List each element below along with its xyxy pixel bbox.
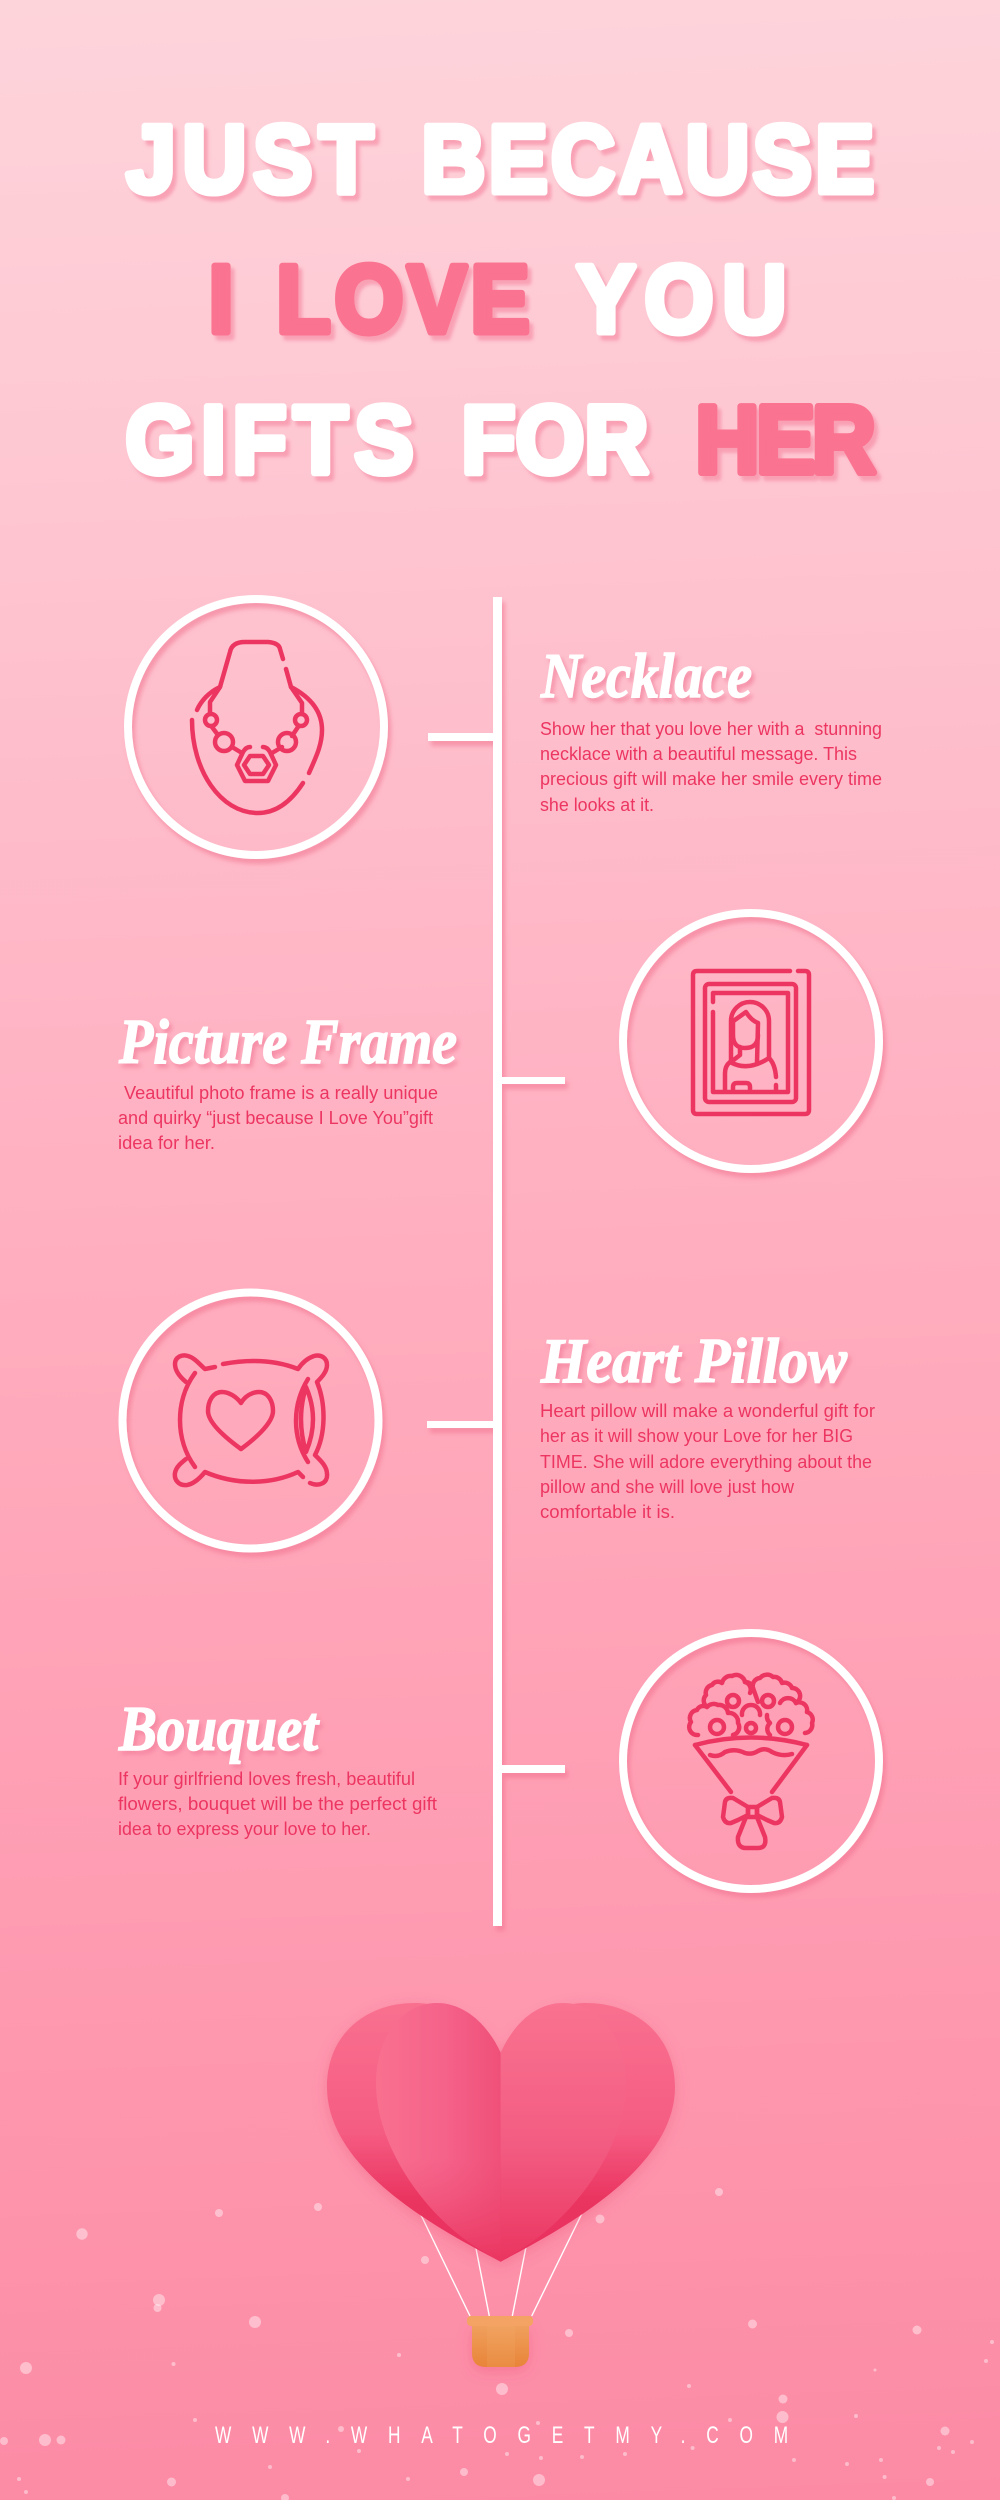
picture frame text: Veautiful photo frame is a really unique (124, 1083, 438, 1103)
picture frame heading: Picture Frame (118, 1006, 457, 1077)
title: GIFTS (126, 386, 413, 493)
balloon basket (467, 2316, 533, 2367)
necklace text: necklace with a beautiful message. This (540, 744, 857, 764)
picture frame text: idea for her. (118, 1133, 215, 1153)
heart pillow text: pillow and she will love just how (540, 1477, 795, 1497)
balloon dots (0, 2188, 994, 2500)
title: LOVE (276, 246, 530, 353)
picture frame text: and quirky “just because I Love You”gift (118, 1108, 433, 1128)
title: I (209, 246, 233, 353)
necklace text: she looks at it. (540, 795, 654, 815)
title: YOU (576, 246, 786, 353)
picture frame circle (623, 913, 879, 1169)
icon: heart pillow (175, 1355, 327, 1485)
necklace circle (128, 599, 384, 855)
title: JUST (126, 106, 373, 213)
bouquet circle (623, 1633, 879, 1889)
necklace text: Show her that you love her with a stunning (540, 719, 882, 739)
title: BECAUSE (422, 106, 874, 213)
necklace heading: Necklace (540, 640, 752, 711)
website footer: WWW.WHATOGETMY.COM (215, 2422, 788, 2449)
heart balloon (327, 2003, 675, 2367)
bouquet text: flowers, bouquet will be the perfect gift (118, 1794, 437, 1814)
heart pillow heading: Heart Pillow (540, 1325, 847, 1396)
heart pillow text (540, 1401, 875, 1522)
title: FOR (462, 386, 648, 493)
balloon ropes (420, 2213, 582, 2316)
timeline (427, 597, 565, 1926)
panel: necklace (128, 599, 882, 855)
bouquet heading: Bouquet (118, 1693, 320, 1764)
heart pillow circle (122, 1292, 378, 1548)
title (126, 106, 876, 493)
icon: bouquet (689, 1675, 813, 1848)
heart pillow text: Heart pillow will make a wonderful gift for (540, 1401, 875, 1421)
icon: picture frame (693, 971, 809, 1114)
panel: bouquet (118, 1633, 879, 1889)
title: HER (696, 386, 876, 493)
necklace text (540, 719, 882, 815)
heart pillow text: comfortable it is. (540, 1502, 675, 1522)
balloon envelope (327, 2003, 675, 2262)
heart pillow text: her as it will show your Love for her BIG (540, 1426, 853, 1446)
icon: necklace (192, 642, 322, 813)
panel: picture frame (118, 913, 879, 1169)
necklace text: precious gift will make her smile every time (540, 769, 882, 789)
bouquet text (118, 1769, 437, 1839)
panel: heart pillow (122, 1292, 875, 1548)
picture frame text (118, 1083, 438, 1153)
heart pillow text: TIME. She will adore everything about the (540, 1452, 872, 1472)
bouquet text: idea to express your love to her. (118, 1819, 371, 1839)
bouquet text: If your girlfriend loves fresh, beautiful (118, 1769, 415, 1789)
